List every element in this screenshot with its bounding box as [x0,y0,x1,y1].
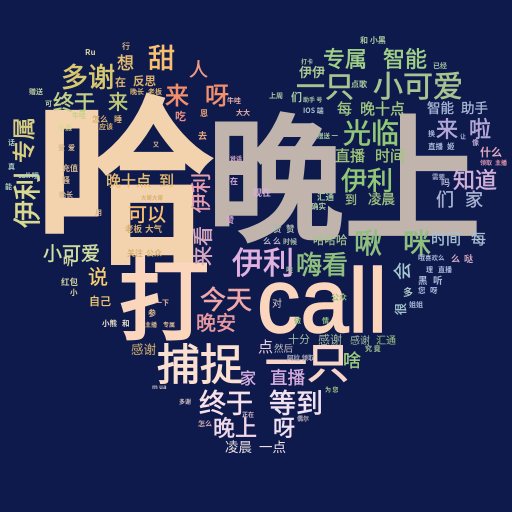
small words: middle column: 说话 [230,154,242,163]
word: 时间 每: 时间 [431,228,461,249]
word: 终于: 终于 [53,87,95,117]
small words: middle column: 大大 [236,108,250,118]
word: 来: 来 [108,86,128,115]
small words: right side: 需要 [432,171,446,181]
small words: upper left: 睡 [114,114,122,125]
small words: lower fragments [145,265,381,429]
small words row near center bottom: 汇通 [376,332,396,347]
word: 智能 助手: 助手 [461,97,488,117]
word: 可以: 可以 [128,200,166,227]
small words: lower fragments: 专属 [163,320,175,329]
small words: inside 哈: 用 [95,208,102,218]
small words: lower fragments: m ua [152,382,167,391]
small words: middle column: 时候 [283,237,297,247]
word: 每 晚十点 [337,98,405,119]
small words: right side: 喜欢么 [425,252,445,262]
small words: lower fragments: 参 [148,308,156,319]
small words: left edge: 牛哇 [72,111,86,121]
word: 说 自己 [88,261,111,309]
word: 伊利 来看 rotated [185,173,216,266]
small words: upper left: 反思 [133,73,156,89]
word: 晚上 bottom: 晚上 [213,411,257,443]
word: 今天: 今天 [200,280,252,317]
small words: right side: 让 [460,132,466,141]
small words: right side: 领取 [480,158,492,167]
word: 来 啦: 来 [436,112,458,144]
small words: upper right: IOS 端 [303,106,324,116]
small words: middle column: 赞 [286,223,295,235]
small words: lower fragments: 哇 [286,265,293,275]
small words: upper left: 晚长 [130,87,144,97]
small words: right side: 换 [428,129,435,139]
word: 小可爱 left: 小可爱 [43,239,100,266]
word: 捕捉: 捕捉 [157,331,243,393]
small words: right side: 什么 [480,144,502,160]
word: call: call [257,251,387,352]
small words: left edge: 真 [8,162,15,172]
small words: upper right: 打卡 [301,57,313,66]
small words: lower fragments: 正在 [242,410,254,419]
small words: middle column: 么 么 [263,236,281,247]
small words: inside 哈: 爱 [68,143,75,153]
small words: upper right: 伊伊 [299,62,325,81]
word: 伊利 来看 rotated: 来看 [187,226,216,266]
word: 伊利 来看 rotated: 伊利 [185,173,214,213]
word: 一只 小可爱: 一只 [296,64,354,106]
small words: right side: 直播 [428,141,443,152]
small words row near center bottom [272,295,396,355]
small words: right side: 理 [426,265,433,275]
small words: middle column: 现在 [253,186,271,199]
word: 晚十点 到: 到 [159,170,174,191]
word: 啾 咪: 咪 [403,222,431,262]
small words: upper left: Ru [85,47,96,58]
small words: right side: 么 [451,252,460,265]
small words: inside 哈: 大哥大哥 [141,194,164,202]
word: 会 很 rotated: 很 [392,303,409,315]
small words: right side: 姐姐 [409,300,423,310]
small words row near center bottom: 十分 [288,331,310,347]
small words row near center bottom: 感谢 [350,332,370,347]
word: 时间 每 [431,228,486,249]
small words: lower fragments: 做 [294,316,301,326]
small words: inside 哈: 骚 [62,175,70,186]
small words: right side: 听 [433,273,443,287]
word: 每 晚十点: 每 [337,98,352,119]
word: 伊利 rotated: 伊利 [6,172,46,228]
small words: left edge: 能 [5,182,12,192]
word: 啥: 啥 [343,347,361,373]
word: 来 啦 [436,112,491,144]
word: 点 一点: 一点 [259,436,286,456]
word: 终于 bottom: 终于 [199,382,253,421]
word: 直播 时间: 直播 [335,145,365,166]
small words: right side: 哒 [464,252,473,265]
small words: upper right: 上周 [269,91,283,101]
small words: lower fragments: 怎么 [198,419,212,429]
small words: upper right: 助手 号 [303,95,322,104]
small words: left edge: 红包 [61,276,79,288]
small words: lower fragments: 主播 [145,320,157,329]
word: 家 直播: 家 [240,365,256,389]
word: 想 人: 想 [117,49,134,74]
small words: left edge: 小熊 [102,318,117,329]
small words: upper left: 大气 [145,223,163,235]
small words: upper right: 点歌 [351,79,367,90]
small words: left edge: 话 [8,138,15,148]
small words: left edge: 小黑 [58,123,72,133]
word: 来 呀: 来 [165,76,189,111]
small words: upper right: 赠送 一 [317,130,338,140]
small words: upper right: 和 小黑 [360,35,386,46]
small words: right side: 直播 [438,265,452,275]
small words: upper right [269,35,447,212]
word: 一只 bottom: 一只 [265,330,349,391]
word: 到 凌晨: 到 [345,191,357,208]
word: 专属 智能: 专属 [323,42,367,74]
word: 哈哈哈: 哈哈哈 [313,232,348,248]
word: 伊利 pink: 伊利 [232,238,294,283]
word: 智能 助手 [427,97,488,117]
small words: middle column: 牛哇 [227,96,241,106]
word: 来 啦: 啦 [469,112,491,144]
word: 来 呀: 呀 [205,76,229,111]
small words: left edge: 和 [122,318,130,329]
small words: middle column: 吃 [175,108,186,124]
word: 们 家 [436,186,483,212]
word: 嗨看: 嗨看 [296,245,348,282]
word: 呀 bottom: 呀 [273,411,295,443]
small words: right side: 哦 [418,253,425,263]
word: 哈: 哈 [35,38,215,299]
word: 晚上: 晚上 [207,71,481,269]
small words: lower fragments: 偶尔 [297,414,309,423]
word: 伊利 green: 伊利 [341,161,393,198]
word: 说 自己: 说 [88,261,108,290]
word: 想 人: 人 [189,55,208,82]
small words: right side [403,129,507,310]
small words: left edge: call 哦 [18,171,39,181]
word: 家 直播 [240,365,305,390]
small words: middle column [175,96,297,247]
small words: upper left [85,41,163,259]
word: 们 家: 们 [436,186,454,212]
word: 晚十点 到 [106,170,174,191]
small words: upper left: 关注 [127,248,143,259]
small words: middle column: 恩 [200,108,208,119]
small words: right side: 黑 [418,273,428,287]
small words: upper left: 怎么 [92,114,108,125]
word: 每 晚十点: 晚十点 [360,98,405,119]
word: 专属 智能 [323,42,427,74]
word: 家 直播: 直播 [270,365,305,390]
small words: upper right: 们 [291,89,302,105]
small words: right side: 姬 [447,141,455,152]
small words: inside 哈: 充值 [62,163,78,174]
word: 等到: 等到 [269,382,323,421]
small words: inside 哈: 爱 [58,143,65,153]
small words: upper left: 在 [115,74,126,90]
small words: lower fragments: 究 竟 [365,344,381,354]
word: 甜: 甜 [148,37,175,76]
word: 点 一点 [258,336,286,456]
small words: lower fragments: 为 您 [325,385,338,394]
word: 凌晨: 凌晨 [225,436,252,456]
word: 智能 助手: 智能 [427,97,454,117]
small words: upper left: 老板 [148,87,162,97]
small words: right side: 多 [403,284,413,299]
word: 一只 小可爱: 小可爱 [373,62,463,106]
word: 多谢: 多谢 [61,56,115,95]
small words: left edge: 听 [63,253,74,269]
word: 点 一点: 点 [258,336,273,357]
small words: right side: 吗 [441,176,450,189]
small words: lower fragments: 多谢 [179,397,191,406]
small words: upper right: 汇通 [317,191,335,203]
word: 想 人 [117,49,208,82]
small words: upper right: 确实 [311,201,326,212]
word: 晚安: 晚安 [196,307,236,336]
small words: left edge: 赠送 [29,87,43,97]
small words: lower fragments: 一下 [155,298,169,308]
small words: middle column: 赞 [273,223,282,235]
small words: middle column: 去 [198,129,207,142]
word: 打: 打 [119,228,209,358]
word: 专属 rotated: 专属 [5,117,39,163]
small words: right side: 呀 [430,285,438,296]
word: 来 呀 [165,76,229,111]
small words: upper left: 公众 [146,248,162,259]
small words: inside 哈 [58,140,164,218]
small words row near center bottom: 对 [272,295,282,310]
small words: upper left: 老板 [125,223,143,235]
word: 时间 每: 每 [471,228,486,249]
word: 到 凌晨 [345,188,395,208]
word: 们 家: 家 [465,186,483,212]
word: 一只 小可爱 [296,62,463,106]
small words: right side: 主播 [495,158,507,167]
small words: inside 哈: 又 [153,140,159,149]
word: 晚十点 到: 晚十点 [106,170,151,191]
word: 专属 智能: 智能 [383,42,427,74]
small words: upper left: 应该 [99,122,113,132]
word: 感谢 left: 感谢 [131,339,156,358]
word: 会 很 rotated [389,262,415,315]
small words: left edge [5,87,130,329]
small words: upper left: 行 [122,41,130,52]
word: 会 很 rotated: 会 [389,262,415,280]
small words: lower fragments: 情 [322,316,329,326]
small words row near center bottom: 感谢 [318,331,342,348]
word: 啾 咪 [354,222,431,262]
word: 啾 咪: 啾 [354,222,382,262]
small words: inside 哈: 晚长 [59,190,73,200]
small words: left edge: 小 [70,287,78,298]
word: 光临: 光临 [343,112,399,152]
small words: middle column: 赞 [226,215,234,226]
small words: right side: 像 [472,138,479,148]
small words: middle column: 在 [230,176,238,187]
small words: right side: 您 [418,285,426,296]
word: 直播 时间 [335,145,405,166]
small words: left edge: 可 [45,99,52,109]
small words: lower fragments: 公众 [331,292,347,303]
small words row near center bottom: 然后 [274,341,294,355]
word: 到 凌晨: 凌晨 [368,188,395,208]
word: 说 自己: 自己 [89,293,111,309]
small words: upper right: 已经 [433,61,447,71]
small words: lower fragments: 阿拉 领取 [287,352,315,362]
word: 知道: 知道 [453,163,497,195]
word: 直播 时间: 时间 [375,145,405,166]
